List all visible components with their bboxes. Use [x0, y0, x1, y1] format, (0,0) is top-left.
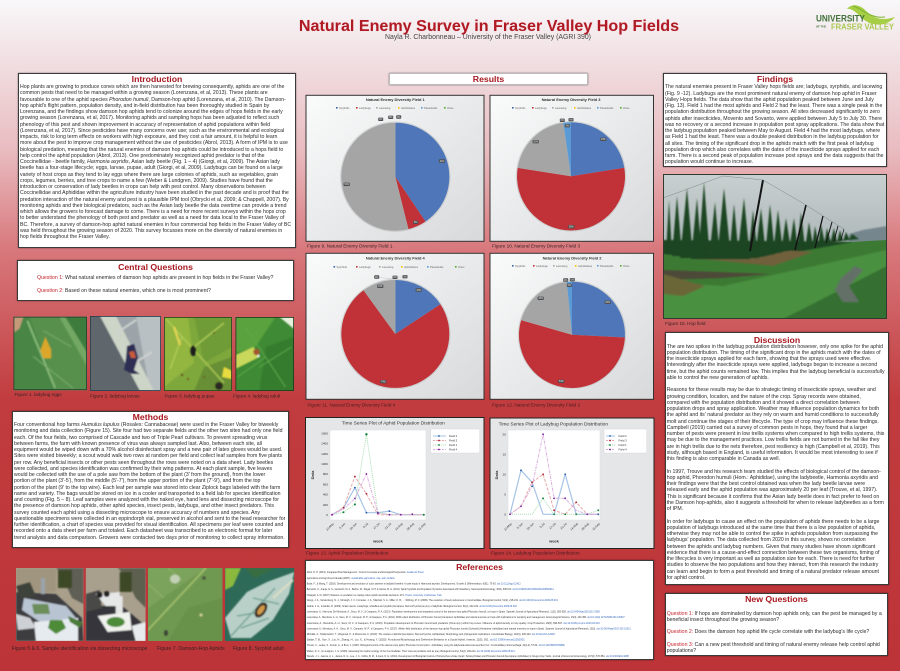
text: findings body: was no recovery or a second increase in population post spray applications. The data show that: [665, 122, 884, 128]
chart: Natural Enemy Diversity Field 2: Aphidoletes: [578, 264, 593, 268]
chart: Natural Enemy Diversity Field 3: Ladybugs: [535, 106, 547, 110]
text: introduction body: growing season (Lorenzana, et al, 2017). Monitoring aphids and sampling hops has been adjusted to reflect such: [20, 115, 279, 121]
chart: time series of aphid population: Field 1: [449, 443, 458, 447]
list: references: [306, 570, 631, 658]
text: discussion body: growing condition, location, and the nature of the crop. Spray records were obtained,: [667, 394, 861, 400]
chart: Natural Enemy Diversity Field 2: Syrphids: [515, 264, 526, 268]
chart: time series of aphid population: 5-Jun: [338, 522, 346, 530]
chart: time series of ladybug population: Field 2: [618, 434, 627, 438]
question 1: Question 1: What natural enemies of damson hop aphids are present in hop fields in the Fraser Valley?: [37, 275, 273, 281]
text: discussion body: compared with the population distribution and it showed a direct correlation between: [667, 400, 860, 406]
chart: time series of ladybug population: 28-Aug: [580, 522, 590, 531]
list: references: Abrol, D. P. (2013). Integrated Pest Management : Current Concepts and Ecological Perspective. Academic Press: [307, 570, 424, 574]
chart: time series of aphid population: week: [372, 538, 384, 544]
list: references: Lorenzana, A., Mendoza, A. H., Seco, M. V., Campelo, M. P., & Casquero, P. A. (2017). Within-field distribution of the damson-hop aphid Phorodon humuli (Schrank) (Hemiptera: Aphididae) and natural enemies on hops in Spain. Spanish Journal of Agricultural Research, 15(2). doi:10.5424/sjar/2017152-10521: [307, 627, 631, 631]
chart: time series of aphid population: 31-Jul: [384, 522, 392, 530]
chart: time series of ladybug population: week: [548, 538, 560, 544]
text: discussion body: the Damson hop-aphids, also it suggests a threshold for when to release ladybeetles as a form: [667, 500, 884, 506]
caption: figure 9: Figure 9. Natural Enemy Diversity Field 1: [307, 244, 393, 248]
chart: Natural Enemy Diversity Field 1: Aphidoletes: [401, 106, 416, 110]
logo: University of the Fraser Valley: [816, 5, 895, 32]
question 2: Question 2: Based on these natural enemies, which one is most prominent?: [37, 288, 211, 294]
text: introduction body: which allows the growers to forecast damage to come. There is a need for more recent surveys within the hops crop: [20, 209, 286, 215]
chart: Natural Enemy Diversity Field 2: 54%: [559, 381, 564, 383]
chart: Natural Enemy Diversity Field 3: 3%: [566, 126, 569, 128]
caption: figure 10: Figure 10. Natural Enemy Diversity Field 3: [492, 244, 580, 248]
text: findings body: as Field 1 had the least. There was a double peaked distribution in the ladybug population for: [665, 134, 879, 140]
chart: time series of aphid population: 22-May: [325, 521, 335, 532]
photo: dissecting microscope: [86, 568, 146, 641]
text: methods body: portion of the plant (9' to the top wire). Each leaf per sample was stored into clear Ziplock bags labeled with the farm: [14, 485, 280, 491]
text: introduction body: biological predation, meaning that the natural enemies of damson hop aphids could be introduced to a hops field to: [20, 147, 283, 153]
text: findings body: (Fig. 13). Field 1 had the most aphids and Field 2 had the least. There was a single peak in the: [665, 103, 882, 109]
chart: time series of aphid population: 0: [326, 513, 328, 517]
text: methods body: between farms, the farm with known presence of virus was always sampled last. Also, between each site, all: [14, 441, 262, 447]
subtitle: author: Nayla R. Charbonneau – University of the Fraser Valley (AGRI 390): [385, 34, 591, 41]
chart: time series of ladybug population: 11-Sep: [591, 522, 601, 531]
text: methods body: monitoring and data collection (Figure 15). Site four had two separate fields and the other two sites had only one field: [14, 428, 282, 434]
text: discussion body: In 1997, Trouve and his research team studied the effects of biological control of the damson-: [667, 469, 881, 475]
chart: Natural Enemy Diversity Field 4: 0%: [403, 276, 407, 278]
panel: central questions: [17, 260, 294, 301]
text: discussion body: study, although based in England, is useful information. It would be most interesting to see if: [667, 450, 878, 456]
chart: Natural Enemy Diversity Field 3: Syrphids: [515, 106, 526, 110]
text: methods body: recorded onto a data sheet per farm and totaled. Each datasheet was transcribed to an electronic format for later: [14, 528, 272, 534]
text: methods body: Sites were visited biweekly; a scout would walk two rows at random per field and collect leaf samples from five plants: [14, 453, 282, 459]
chart: Natural Enemy Diversity Field 4: Parasitoids: [430, 265, 444, 269]
photo: sample identification table: [16, 568, 84, 641]
chart: Natural Enemy Diversity Field 1: Ladybugs: [359, 106, 371, 110]
chart: time series of aphid population: 17-Jul: [372, 522, 381, 530]
question 3: Question 3: Can a new pest threshold and timing of natural enemy release help control aphid: [667, 642, 880, 648]
chart: Natural Enemy Diversity Field 2: Lacewing: [556, 264, 568, 268]
chart: time series of aphid population: Time Series Plot of Aphid Population Distribution: [342, 421, 445, 427]
chart: time series of aphid population: 600: [323, 482, 328, 486]
chart: time series of ladybug population: 17-Jul: [548, 522, 557, 530]
list: references: Lorenzana, A., Hermoso De Mendoza, A., Seco, M. V., & Casquero, P. A. (2013). Population development and integrated control of the damson-hop aphid Phorodon humuli, on hops in Spain. Spanish Journal of Agricultural Research, 11(2), 550-558. doi:10.5424/sjar/2013112-3268: [307, 610, 600, 614]
chart: Natural Enemy Diversity Field 2: 0%: [571, 280, 574, 282]
text: introduction body: hop fields throughout the Fraser Valley.: [20, 234, 110, 240]
question 1: Question 1: If hops are dominated by damson hop aphids only, can the pest be managed by a: [667, 611, 882, 617]
text: introduction body: more about the pest to improve crop management without the use of pesticides (Abrol, 2013). A form of IPM is to use: [20, 140, 288, 146]
caption: figure 14: Figure 14. Ladybug Population Distribution: [491, 551, 580, 556]
text: methods body: survey counted each aphid using a dissecting microscope to ensure accuracy of numbers and species. Any: [14, 510, 260, 516]
chart: time series of aphid population: 200: [323, 503, 328, 507]
chart: Natural Enemy Diversity Field 4: Orius: [458, 265, 465, 269]
panel: new questions: [665, 593, 888, 656]
caption: figures 5 and 6: Figure 5 & 6. Sample identification via dissecting microscope: [12, 646, 148, 652]
photo: ladybug eggs: [14, 317, 87, 390]
chart: Natural Enemy Diversity Field 2: 18%: [538, 298, 543, 300]
heading: results: Results: [473, 74, 504, 84]
chart: time series of aphid population: 800: [323, 472, 328, 476]
photo: hop field: [663, 174, 887, 319]
text: methods body: name and variety. The bags would be stored on ice in a cooler and transported to a field lab for species identification: [14, 491, 281, 497]
text: discussion body: In order for ladybugs to cause an effect on the population of aphids there needs to be a large: [667, 519, 879, 525]
chart: time series of aphid population: Field 4: [449, 448, 458, 452]
text: methods body: trend analysis and data comparison. Growers were contacted two days prior of monitoring to collect spray information.: [14, 535, 285, 541]
chart: Natural Enemy Diversity Field 4: Aphidoletes: [404, 265, 419, 269]
panel: methods: [12, 411, 289, 548]
heading: central questions: Central Questions: [118, 262, 193, 272]
text: findings body: farm. There is a second peak of population increase post sprays and the data suggests that the: [665, 153, 884, 159]
question 1: [667, 611, 882, 623]
text: findings body: The natural enemies present in Fraser Valley hops fields are; ladybugs, syrphids, and lacewing: [665, 84, 882, 90]
text: introduction body: to better understand the phenology of both pest and predator as well as a need for data local to the Fraser Valley of: [20, 215, 284, 221]
chart: Natural Enemy Diversity Field 4: Syrphids: [336, 265, 348, 269]
chart: time series of ladybug population: 22-May: [503, 521, 513, 532]
heading: introduction: Introduction: [132, 74, 182, 84]
chart: Natural Enemy Diversity Field 4: Ladybugs: [359, 265, 371, 269]
chart: Natural Enemy Diversity Field 4: [306, 253, 484, 399]
text: findings body: all sites. The timing of the significant drop in the aphids match with the first peak of ladybug: [665, 141, 874, 147]
chart: Natural Enemy Diversity Field 3: Aphidoletes: [577, 106, 592, 110]
chart: Natural Enemy Diversity Field 4: 0%: [393, 277, 397, 279]
text: discussion body: Campbell (2019) carried out a survey of common pests in hops, they found that a larger: [667, 425, 867, 431]
text: discussion body: time, but the aphid counts remained low. This implies that the ladybug beneficial is successfully: [667, 369, 885, 375]
text: discussion body: ladybugs' population. The data collected from 2020 in this survey, shows no correlation: [667, 537, 866, 543]
chart: time series of aphid population: 11-Sep: [417, 522, 427, 531]
caption: figure 12: Figure 12. Natural Enemy Diversity Field 2: [492, 402, 580, 408]
panel: discussion: [665, 332, 889, 585]
text: discussion body: released early and the aphid population was approximately 20 per leaf (Trouve, et al, 1997).: [667, 487, 877, 493]
heading: new questions: New Questions: [745, 594, 808, 604]
chart: time series of aphid population: Data: [310, 470, 315, 479]
chart: Natural Enemy Diversity Field 1: [306, 95, 484, 241]
photo: ladybug pupae: [164, 317, 232, 391]
list: references: Giorgi, J. A., Vandenberg, N. J., McHugh, J. V., Forrester, J. A., Ślipiński, S. A., Miller, K. B., ... Whiting, M. F. (2009). The evolution of food preferences in Coccinellidae. Biological Control, 51(2), 215-231. doi:10.1016/j.biocontrol.2009.05.019: [307, 597, 558, 602]
text: introduction body: phenology of this pest and shown improvement in accuracy of representation of aphid populations within field: [20, 122, 270, 128]
chart: Natural Enemy Diversity Field 4: 10%: [378, 286, 383, 288]
chart: Natural Enemy Diversity Field 1: 5%: [414, 222, 417, 224]
chart: Natural Enemy Diversity Field 4: Natural Enemy Diversity Field 4: [366, 256, 426, 260]
text: discussion body: of IPM.: [667, 506, 683, 512]
chart: time series of ladybug population: Time Series Plot of Ladybug Population Distribution: [499, 421, 608, 427]
chart: time series of aphid population: 19-Jun: [349, 522, 358, 531]
list: references: Grable, J. H., & Hardie, R. (2009). Scale insects, mealybugs, whiteflies and psyllids (Hemiptera, Sternorrhyncha) as prey of ladybirds. Biological Control, 51(2), 232-243. doi:10.1016/j.biocontrol.2009.05.018: [307, 604, 517, 608]
chart: time series of ladybug population: 31-Jul: [559, 522, 568, 530]
heading: discussion: Discussion: [754, 334, 800, 344]
text: findings body: Valley Hops fields. The data show that the aphid population peaked between June and July: [665, 97, 874, 103]
text: methods body: Four conventional hop farms Humulus lupulus (Rosales: Cannabaceae) were used in the Fraser Valley for biweekly: [14, 422, 278, 428]
text: discussion body: evidence that there is a cause-and-effect connection between these two organisms, timing of: [667, 550, 879, 556]
text: discussion body: the lifecycles is very important as well as population size for each. There is need for further: [667, 556, 875, 562]
text: discussion body: population drops and spray application. Weather may influence population dynamics for both: [667, 406, 879, 412]
chart: Natural Enemy Diversity Field 1: 54%: [344, 184, 349, 186]
chart: time series of ladybug population: 10: [503, 472, 506, 476]
text: methods body: and counting (Fig. 5 – 8). Leaf samples were analyzed with the naked eye, hand lens and dissecting microscope for: [14, 497, 279, 503]
chart: Natural Enemy Diversity Field 1: Natural Enemy Diversity Field 1: [366, 97, 426, 102]
chart: time series of aphid population: 1400: [321, 442, 328, 446]
chart: Natural Enemy Diversity Field 1: Parasitoids: [424, 106, 438, 110]
question 3: populations?: [667, 648, 696, 654]
chart: Natural Enemy Diversity Field 2: 2%: [568, 285, 571, 287]
text: introduction body: introduction or conservation of lady beetles in crops can help with pest control. Many observations between: [20, 184, 266, 190]
chart: time series of ladybug population: 15: [503, 452, 506, 456]
chart: time series of ladybug population: 19-Jun: [526, 522, 535, 531]
text: discussion body: population distribution. The timing of the significant drop in the aphids match with the dates of: [667, 350, 881, 356]
caption: figure 15: Figure 15. Hop field: [665, 321, 706, 326]
chart: Natural Enemy Diversity Field 1: 0%: [397, 117, 400, 119]
chart: Natural Enemy Diversity Field 3: 55%: [569, 226, 574, 228]
chart: time series of aphid population: 1200: [321, 452, 328, 456]
list: references: Agriculture and Agri-Food Canada (2007). sustainable agriculture, cap, web; bulletin: [307, 576, 395, 580]
chart: Natural Enemy Diversity Field 1: Lacewing: [379, 106, 391, 110]
text: introduction body: predation interaction of the natural enemy and pest is a plausible IPM tool (Obrycki et al, 2009; & Chappell, 2007). By: [20, 197, 289, 203]
chart: Natural Enemy Diversity Field 1: 0%: [389, 117, 392, 119]
chart: time series of ladybug population: 0: [504, 512, 506, 516]
chart: time series of aphid population: Field 2: [449, 434, 458, 438]
text: discussion body: [666, 344, 885, 581]
text: findings body: population distribution throughout the growing season. All sites decreased significantly to zero: [665, 109, 880, 115]
caption: figure 1: Figure 1. ladybug eggs: [14, 392, 62, 397]
chart: Natural Enemy Diversity Field 2: 26%: [605, 302, 610, 304]
chart: time series of ladybug population: 3-Jul: [538, 522, 546, 529]
text: methods body: portion of the plant (3'-5'), from the middle (5'-7'), from the upper portion of the plant (7'-9'), and from the top: [14, 478, 260, 484]
photo: damson-hop aphids: [148, 568, 222, 641]
text: findings body: population drop which also correlates with the dates of the insecticide sprays applied for each: [665, 147, 879, 153]
chart: Natural Enemy Diversity Field 1: 0%: [379, 119, 382, 121]
text: findings body: aphids after insecticides, Movento and Sovanto, were applied between July 5 to July 30. There: [665, 116, 882, 122]
chart: Natural Enemy Diversity Field 1: Syrphids: [339, 106, 350, 110]
text: discussion body: can learn and begin to form a pest threshold and timing of a natural predator release amount: [667, 569, 879, 575]
question 3: [667, 642, 880, 654]
text: discussion body: This is significant because it confirms that the Asian lady beetle does in fact prefer to feed on: [667, 494, 879, 500]
text: discussion body: number of pests were present in low trellis systems when compared to high trellis systems, this: [667, 431, 884, 437]
text: discussion body: their findings were that the best control obtained was when the lady beetle larvae were: [667, 481, 865, 487]
chart: Natural Enemy Diversity Field 1: 41%: [440, 161, 444, 163]
text: discussion body: studies to observe the two populations and how they interact, from this research the industry: [667, 562, 878, 568]
text: introduction body: hop aphid's flight pattern, population density, and in-field distribution has been thoroughly studied in Spain by: [20, 103, 269, 109]
chart: Natural Enemy Diversity Field 3: Lacewing: [555, 106, 567, 110]
text: discussion body: The are two spikes in the ladybug population distribution however, only one spike for the aphid: [667, 344, 883, 350]
photo: syrphid adult: [225, 568, 294, 641]
list: references: Trouvé, C., Ledee, S., Ferran, A., & Brun, J. (1997). Biological control of the damson-hop aphid, Phorodon humuli (Hom.: Aphididae), using the ladybeetle Harmonia axyridis (Col.: Coccinellidae). Entomophaga, 42(1-2), 57-62. doi:10.1007/BF02769880: [307, 643, 565, 647]
text: methods body: further identification, a chart of species was provided for visual identification. All specimens per leaf were counted and: [14, 522, 283, 528]
chart: Natural Enemy Diversity Field 3: [490, 95, 654, 241]
list: references: Bernardo, U., Araujo, E. S., Iannacchi, M. A., Bellino, M., Riegel, M. P. & Garcia, M. G. (2011). Spiral Syrphids and Population Dynamics Associated with Strawberry. Neotropical Entomology, 40(5), 608-613. doi:10.1590/S1519-566X2011000500014: [307, 587, 554, 591]
text: findings body: (Fig. 9 -12). Ladybugs are the most prominent natural enemy of damson hop aphid in Fraser: [665, 91, 877, 97]
photo: ladybug adult: [236, 317, 294, 391]
text: discussion body: hop aphid, Phorodon humuli (Hom.: Aphididae), using the ladybeetle, Harmonia axyridis and: [667, 475, 878, 481]
chart: Natural Enemy Diversity Field 2: [490, 253, 654, 399]
text: discussion body: between the aphids and ladybug numbers. Given that many studies have shown significant: [667, 544, 875, 550]
chart: time series of ladybug population: Field 1: [618, 443, 627, 447]
heading: findings: Findings: [757, 74, 793, 84]
text: discussion body: able to control the new generation of aphids.: [667, 375, 769, 381]
chart: Natural Enemy Diversity Field 4: 16%: [416, 290, 421, 292]
panel: references: [305, 560, 654, 660]
question 1: beneficial insect throughout the growing season?: [667, 617, 779, 623]
text: discussion body: for aphid control.: [667, 575, 705, 581]
text: introduction body: was held throughout the growing season of 2020. This survey focusses more on the diversity of natural enemies in: [20, 228, 282, 234]
text: introduction body: Coccinellidae and Aphididae within the agriculture industry have been studied in the past decade and is proof that the: [20, 190, 289, 196]
caption: figure 7: Figure 7. Damson-Hop Aphids: [157, 646, 225, 652]
text: methods body: the presence of damson hop aphids, other aphid species, insect pests, ladybugs, and other insect predators. This: [14, 503, 274, 509]
logo: University of the Fraser Valley: UNIVERSITY: [816, 13, 865, 23]
chart: time series of ladybug population: Data: [494, 470, 499, 479]
text: introduction body: crops, legumes, berries, and tree crops to name a few (Weber & Lundgren, 2009). Studies have found that the: [20, 178, 273, 184]
text: discussion body: this finding is also comparable in Canada as well.: [667, 456, 780, 462]
title: Natural Enemy Survey in Fraser Valley Hop Fields: [299, 17, 679, 35]
text: introduction body: variety of host crops as they tend to lay eggs where there are large colonies of aphids, such as vegetables, grain: [20, 172, 278, 178]
chart: Natural Enemy Diversity Field 3: 0%: [569, 120, 573, 122]
text: methods body: questionable specimens were collected in an eppindorph vial, preserved in alcohol and sent to the head researcher for: [14, 516, 285, 522]
text: discussion body: the insecticide sprays applied for each farm, showing that the sprays used were effective.: [667, 356, 871, 362]
caption: figure 13: Figure 13. Aphid Population Distribution: [306, 551, 389, 556]
panel: findings: [663, 73, 887, 167]
text: discussion body: otherwise they may not be able to control the spike in aphids population from surpassing the: [667, 531, 878, 537]
text: introduction body: Lorenzana, and the findings show damson hop aphids tend to colonize around the edges of hops fields in the early: [20, 109, 283, 115]
chart: time series of ladybug population: 20: [503, 432, 506, 436]
text: discussion body: are in high trellis due to the nets therefore, pest resiliency is high (Campbell et al, 2019). This: [667, 444, 880, 450]
logo: University of the Fraser Valley: OF THE: [816, 24, 826, 28]
caption: figure 3: Figure 3. ladybug pupae: [164, 394, 215, 398]
text: discussion body: population of ladybugs introduced at the same time that there is a low population of aphids,: [667, 525, 875, 531]
text: discussion body: may be due to the management practices. Low trellis fields are not burned in the fall like they: [667, 437, 880, 443]
heading: methods: Methods: [133, 412, 168, 422]
chart: Natural Enemy Diversity Field 3: 23%: [601, 139, 606, 141]
text: findings body: the ladybug population peaked between May to August. Field 4 had the most ladybugs, where: [665, 128, 880, 134]
text: introduction body: common pests that need to be managed within a growing season (Lorenzana, et al, 2013). These plants are: [20, 90, 268, 96]
text: introduction body: [20, 84, 291, 240]
photo: ladybug larvae: [90, 316, 161, 391]
text: introduction body: favourable to one of the aphid species Phorodon humuli, Damson-hop aphid (Lorenzana, et al, 2010). The Damson-: [20, 97, 286, 103]
text: introduction body: Hop plants are growing to produce cones which are then harvested for brewing consequently, aphids are one of the: [20, 84, 284, 90]
list: references: Lorenzana, A., Mendoza, A. H., Seco, M. V., & Casquero, P. A. (2010). Population development of Phorodon humuli and predators (Orius spp.) within hop cones: Influence of aphid density on hop quality. Crop Protection, 29(8), 832-837. doi:10.1016/j.cropro.2010.04.010: [307, 621, 600, 625]
heading: results: [389, 73, 588, 85]
chart: Natural Enemy Diversity Field 3: Parasitoids: [600, 106, 614, 110]
chart: time series of aphid population: 3-Jul: [362, 522, 369, 529]
text: methods body: [14, 422, 286, 541]
text: methods body: were collected, and species identification was confirmed by their wing patterns. At each plant sample, five leaves: [14, 466, 272, 472]
panel: introduction: [18, 73, 296, 248]
text: methods body: equipment would be wiped down with a 70% alcohol disinfectant spray and a new pair of latex gloves would be used.: [14, 447, 282, 453]
text: introduction body: impacts, risk to long term effects on workers with high exposure, and they cost a fair amount, it is helpful to learn: [20, 134, 277, 140]
caption: figure 2: Figure 2. ladybug larvae: [90, 394, 140, 398]
text: introduction body: beetle has a four-stage lifecycle; eggs, larvae, pupae, adult (Giorgi, et al, 2009). Ladybugs can be found on a large: [20, 165, 283, 171]
chart: Natural Enemy Diversity Field 2: Orius: [623, 264, 630, 268]
text: discussion body: Reasons for these results may be due to strategic timing of insecticide sprays, weather and: [667, 387, 876, 393]
chart: Natural Enemy Diversity Field 3: Natural Enemy Diversity Field 3: [542, 97, 601, 102]
chart: Natural Enemy Diversity Field 2: Parasitoids: [600, 264, 614, 268]
chart: time series of aphid population: Field 3: [449, 438, 458, 442]
list: references: Lorenzana, A., Mendoza, A. H., Seco, M. V., Campelo, M. P., & Casquero, P. A. (2012). Within-plant distribution of Phorodon humuli (Hemiptera: Aphididae) and natural enemies on hops with implications for sampling and management. Entomological Science, 15(4), 442-450. doi:10.1111/j.1479-8298.2012.00527: [307, 615, 625, 619]
caption: figure 4: Figure 4. ladybug adult: [233, 394, 281, 398]
text: methods body: would be collected with the use of a pole saw from the bottom of the plant (3' from the ground), from the lower: [14, 472, 265, 478]
chart: time series of ladybug population: Field 3: [618, 438, 627, 442]
text: introduction body: help control the aphid population (Abrol, 2013). One predominately recognized aphid predator is that of the: [20, 153, 265, 159]
text: findings body: [665, 84, 884, 165]
text: introduction body: Coccinellidae - beetle family, Harmonia axyridis, Asian lady beetle (Fig. 1 – 4) (Giorgi, et al, 2009). The Asian lady: [20, 159, 280, 165]
chart: Natural Enemy Diversity Field 2: Natural Enemy Diversity Field 2: [543, 256, 602, 260]
list: references: Sattar, T. B., Xue, X., Liu, H., Zhang, H., Liu, X., & Huang, Y. (2020). Functional Morphology and Defensive Behavior in a Social Aphid. Insects, 11(5), 301. doi:10.3390/insects11050301: [307, 638, 525, 642]
heading: references: References: [456, 562, 503, 572]
list: references: Michalik, A., Szklarzewicz, T., Wegierek, P., & Wieczorek, K. (2013). The ovaries of aphids (Hemiptera, Sternorrhyncha, Aphidoidea): Morphology and phylogenetic implications. Invertebrate Biology, 132(3), 226-240. doi:10.1111/ivb.12028: [307, 632, 555, 636]
text: discussion body: molt and continue the stages of their lifecycle. The type of crop may influence these findings.: [667, 419, 879, 425]
question 2: Question 2: Does the damson hop aphid life cycle correlate with the ladybug's life cycle?: [667, 629, 869, 635]
chart: Natural Enemy Diversity Field 4: Lacewing: [382, 265, 394, 269]
chart: time series of aphid population: 400: [323, 493, 328, 497]
chart: time series of ladybug population: 14-Aug: [569, 522, 579, 531]
text: introduction body: BC. Therefore, a survey of damson-hop aphid natural enemies in four commercial hop fields in the Fraser Valley of BC: [20, 222, 291, 228]
text: discussion body: Interestingly after the insecticide sprays were applied, ladybugs began to increase a second: [667, 362, 877, 368]
list: references: Chappell, A. M. (2007). Reliance on predation on coating cotton aphid Insecticide decisions. M.S. Thesis, University of Arkansas, Tuck: [307, 593, 442, 597]
list: references: Bode, F., & Wang, T. (2018). Development and evolution of color patterns in ladybird beetles: A case study in Harmonia axyridis. Development, Growth & Differentiation, 60(1), 73-83. doi:10.1111/dgd.12412: [307, 582, 521, 586]
list: references: Woods, J. L., Iwema, A. L., James, D. G., Lee, J. C., Gibbs, B. M., & Gent, D. H. (2014). Development of Biological Control of Tetranychus urticae (Acari: Tetranychidae) and Phorodon humuli (Hemiptera: Aphididae) in Oregon Hop Yards. Journal of Economic Entomology, 107(2), 570-581. doi:10.1603/EC13488: [307, 654, 629, 658]
chart: Natural Enemy Diversity Field 3: Orius: [623, 106, 630, 110]
text: methods body: per row. Any beneficial insects or other pests seen throughout the rows were noted on a data sheet. Lady beetles: [14, 460, 273, 466]
chart: time series of ladybug population: Field 4: [618, 448, 627, 452]
chart: Natural Enemy Diversity Field 3: 0%: [561, 120, 564, 122]
text: introduction body: monitoring aphids and their biological predators, such as the Asian lady beetle the data overtime can provide a trend: [20, 203, 286, 209]
text: discussion body: the aphid and its' natural predator as they rely on warm and humid conditions to successfully: [667, 412, 879, 418]
chart: time series of aphid population: 28-Aug: [406, 522, 415, 531]
chart: Natural Enemy Diversity Field 3: 20%: [533, 142, 538, 144]
chart: Natural Enemy Diversity Field 2: 0%: [564, 280, 567, 282]
text: introduction body: (Lorenzana, et al, 2017). Since pesticides have many concerns over use; such as the environmental and ecological: [20, 128, 284, 134]
caption: figure 8: Figure 8. Syrphid adult: [233, 646, 284, 652]
chart: time series of aphid population: 14-Aug: [394, 522, 404, 531]
chart: time series of aphid population: 1000: [321, 462, 328, 466]
logo: University of the Fraser Valley: FRASER VALLEY: [831, 22, 895, 32]
chart: Natural Enemy Diversity Field 2: Ladybugs: [536, 264, 548, 268]
caption: figure 11: Figure 11. Natural Enemy Diversity Field 4: [308, 402, 396, 408]
chart: time series of ladybug population: 5-Jun: [516, 522, 524, 530]
list: references: Weber, D. C., & Lundgren, J. G. (2009). Assessing the trophic ecology of the Coccinellidae: Their roles as predators and as prey. Biological Control, 51(2), 199-214. doi:10.1016/j.biocontrol.2009.05.013: [307, 649, 515, 653]
chart: Natural Enemy Diversity Field 4: 0%: [375, 277, 378, 279]
chart: Natural Enemy Diversity Field 1: Orius: [447, 106, 454, 110]
chart: Natural Enemy Diversity Field 4: 74%: [381, 382, 386, 384]
text: findings body: population would continue to increase.: [665, 159, 753, 165]
chart: time series of aphid population: [306, 418, 484, 548]
chart: time series of aphid population: 1600: [321, 432, 328, 436]
chart: time series of ladybug population: 5: [504, 492, 506, 496]
text: methods body: each. Of the four fields, two comprised of Cascade and two of Triple Pearl cultivars. To prevent spreading virus: [14, 435, 267, 441]
chart: time series of ladybug population: [490, 418, 654, 548]
